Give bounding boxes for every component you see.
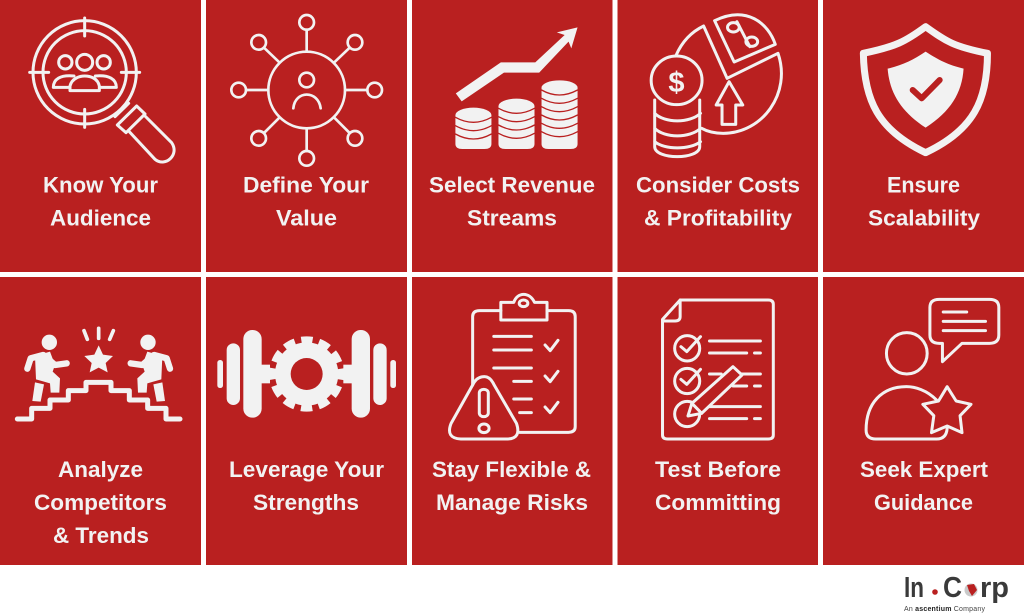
- icon: person with speech bubble and star: [866, 299, 999, 439]
- heading: Define Your Value: Value: [276, 206, 337, 230]
- logo: InCorp: [904, 572, 1009, 613]
- icon: clipboard with warning triangle: [450, 294, 575, 439]
- heading: Test Before Committing: Committing: [655, 490, 781, 515]
- heading: Ensure Scalability: Ensure: [887, 172, 960, 198]
- heading: Define Your Value: [243, 172, 369, 230]
- heading: Consider Costs & Profitability: & Profitability: [644, 206, 792, 230]
- heading: Seek Expert Guidance: Guidance: [874, 490, 973, 515]
- heading: Leverage Your Strengths: [229, 457, 384, 515]
- heading: Know Your Audience: Know Your: [43, 172, 158, 198]
- panel: Know Your Audience: [0, 0, 201, 272]
- heading: Know Your Audience: Audience: [50, 206, 151, 230]
- panel: Leverage Your Strengths: [206, 277, 407, 565]
- heading: Analyze Competitors & Trends: & Trends: [53, 523, 149, 548]
- logo dot: [932, 589, 938, 595]
- logo wordmark: In: [904, 572, 924, 604]
- icon: rising arrow over coin stacks: [455, 27, 578, 149]
- heading: Consider Costs & Profitability: [636, 172, 800, 230]
- heading: Test Before Committing: Test Before: [655, 457, 781, 482]
- panel: Seek Expert Guidance: [823, 277, 1024, 565]
- heading: Analyze Competitors & Trends: Competitors: [34, 490, 167, 515]
- icon: pie chart with coins: [651, 15, 781, 157]
- heading: Leverage Your Strengths: Leverage Your: [229, 457, 384, 482]
- heading: Define Your Value: Define Your: [243, 172, 369, 198]
- logo wordmark: rp: [980, 572, 1009, 604]
- icon: climbers on stairs with star: [17, 328, 180, 419]
- panel: Stay Flexible & Manage Risks: [412, 277, 612, 565]
- icon: checklist document with pencil: [663, 300, 773, 439]
- heading: Test Before Committing: [655, 457, 781, 515]
- panel: Define Your Value: [206, 0, 407, 272]
- panel: Consider Costs & Profitability: [618, 0, 818, 272]
- heading: Select Revenue Streams: Streams: [467, 206, 557, 230]
- icon glyph: dollar sign: $: [668, 67, 685, 99]
- heading: Seek Expert Guidance: Seek Expert: [860, 457, 989, 482]
- heading: Know Your Audience: [43, 172, 158, 230]
- heading: Stay Flexible & Manage Risks: [432, 457, 591, 515]
- heading: Stay Flexible & Manage Risks: Stay Flexible &: [432, 457, 591, 482]
- heading: Analyze Competitors & Trends: Analyze: [58, 457, 143, 482]
- panel: Ensure Scalability: [823, 0, 1024, 272]
- panel: Select Revenue Streams: [412, 0, 612, 272]
- icon: person hub network: [231, 15, 382, 166]
- heading: Ensure Scalability: Scalability: [868, 206, 980, 230]
- heading: Analyze Competitors & Trends: [34, 457, 167, 548]
- icon: shield with check: [863, 27, 987, 153]
- heading: Leverage Your Strengths: Strengths: [253, 490, 359, 515]
- heading: Ensure Scalability: [868, 172, 980, 230]
- heading: Select Revenue Streams: Select Revenue: [429, 172, 595, 198]
- logo globe: [964, 584, 978, 596]
- heading: Consider Costs & Profitability: Consider Costs: [636, 172, 800, 198]
- heading: Select Revenue Streams: [429, 172, 595, 230]
- logo wordmark: [904, 572, 1009, 604]
- logo wordmark: C: [943, 572, 962, 604]
- icon: dumbbell with gear: [217, 330, 396, 418]
- panel: Analyze Competitors & Trends: [0, 277, 201, 565]
- logo tagline: An ascentium Company: [904, 606, 986, 613]
- icon: magnifier over audience: [30, 18, 174, 162]
- panel: Test Before Committing: [618, 277, 818, 565]
- heading: Stay Flexible & Manage Risks: Manage Risks: [436, 490, 588, 515]
- heading: Seek Expert Guidance: [860, 457, 989, 515]
